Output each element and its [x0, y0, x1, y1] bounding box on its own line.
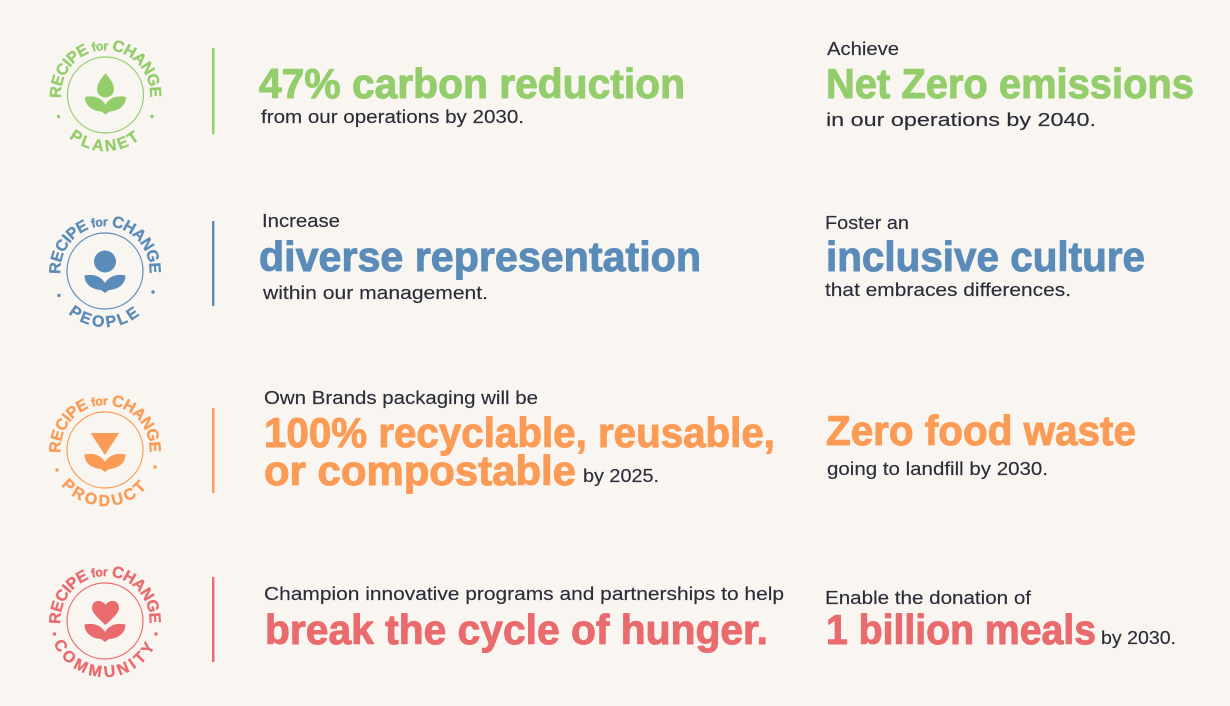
text: champion: Champion innovative programs and partnerships to help [264, 584, 784, 604]
icon: people badge [49, 216, 161, 328]
heading: compostable: or compostable [264, 447, 576, 494]
icon: people badge: RECIPE for CHANGE [49, 216, 161, 274]
icon: people badge: PEOPLE [68, 304, 140, 328]
icon: community badge: COMMUNITY [55, 640, 154, 678]
panel: planet row [50, 39, 1194, 152]
icon: product badge: PRODUCT [62, 478, 144, 506]
panel: product row [49, 388, 1136, 506]
text: packaging: Own Brands packaging will be [264, 388, 538, 408]
panel: people row [49, 211, 1145, 328]
icon: product badge [49, 396, 161, 506]
icon: product badge: RECIPE for CHANGE [49, 396, 161, 452]
divider: product [212, 408, 214, 493]
heading: net zero: Net Zero emissions [826, 60, 1194, 107]
text: foster an: Foster an [825, 213, 909, 233]
text: within management: within our management. [262, 283, 488, 303]
text: operations by 2030: from our operations by 2030. [261, 107, 524, 127]
heading: diverse representation: diverse representation [259, 233, 701, 280]
icon: community badge [49, 566, 161, 678]
icon: planet badge: PLANET [70, 129, 138, 152]
heading: break cycle: break the cycle of hunger. [265, 606, 768, 653]
divider: planet [212, 48, 214, 134]
text: increase: Increase [262, 211, 340, 231]
icon: planet badge [50, 40, 162, 152]
icon: planet badge: RECIPE for CHANGE [50, 40, 162, 98]
heading: billion meals: 1 billion meals [826, 606, 1096, 653]
text: achieve: Achieve [827, 39, 899, 59]
heading: recyclable: 100% recyclable, reusable, [264, 409, 775, 456]
text: operations by 2040: in our operations by 2040. [826, 110, 1096, 130]
text: embraces differences: that embraces differences. [825, 280, 1071, 300]
heading: inclusive culture: inclusive culture [826, 233, 1145, 280]
text: landfill: going to landfill by 2030. [827, 459, 1048, 479]
divider: people [212, 221, 214, 306]
panel: community row [49, 566, 1176, 678]
divider: community [212, 577, 214, 662]
icon: community badge: RECIPE for CHANGE [49, 566, 161, 624]
text: enable donation: Enable the donation of [825, 588, 1032, 608]
heading: carbon reduction: 47% carbon reduction [259, 60, 685, 107]
text: by 2030: by 2030. [1101, 628, 1176, 648]
heading: zero food waste: Zero food waste [826, 407, 1136, 454]
text: by 2025: by 2025. [583, 466, 659, 486]
